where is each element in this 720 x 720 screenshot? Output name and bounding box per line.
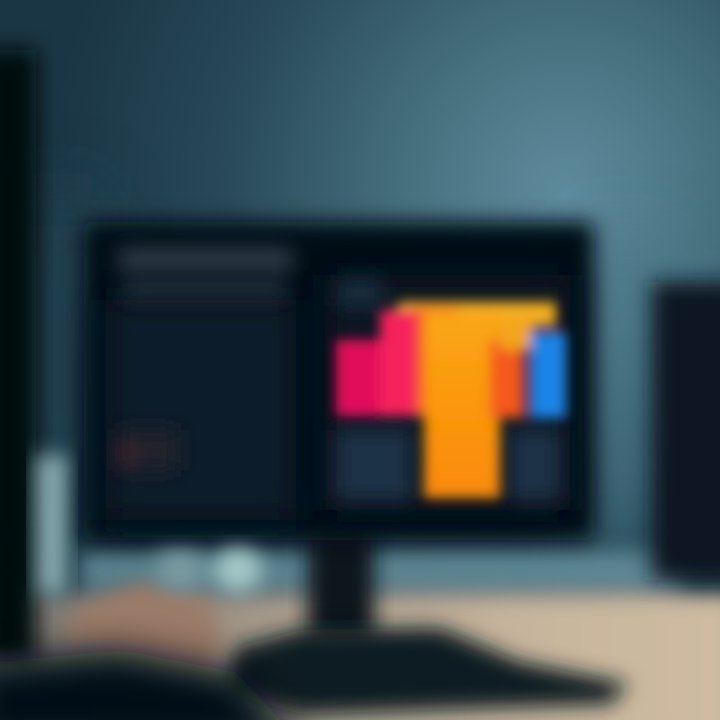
left dark pillar — [0, 50, 36, 660]
bottom left foreground shadow — [0, 650, 310, 720]
red-orange right block — [490, 340, 524, 418]
lower dark blue chart blocks — [336, 280, 560, 500]
blue block — [530, 332, 566, 418]
top yellow band — [398, 302, 556, 326]
crimson block — [336, 340, 386, 416]
pink block — [380, 310, 422, 416]
blurred text lines — [116, 248, 293, 470]
amber block — [500, 318, 534, 350]
pale items behind hand — [160, 548, 262, 592]
desk surface — [0, 552, 720, 720]
orange column — [424, 312, 500, 498]
left screen pane — [106, 300, 296, 520]
right screen pane — [325, 275, 570, 510]
pale object beside the pillar — [36, 455, 68, 595]
monitor frame — [84, 222, 594, 540]
monitor — [84, 222, 594, 540]
wall lower glow — [40, 200, 660, 550]
right speaker — [652, 282, 720, 580]
colourful chart — [336, 302, 566, 498]
monitor base and keyboard — [225, 628, 628, 714]
monitor stand — [308, 530, 374, 640]
hand — [62, 582, 225, 668]
orange-red block — [416, 308, 458, 416]
